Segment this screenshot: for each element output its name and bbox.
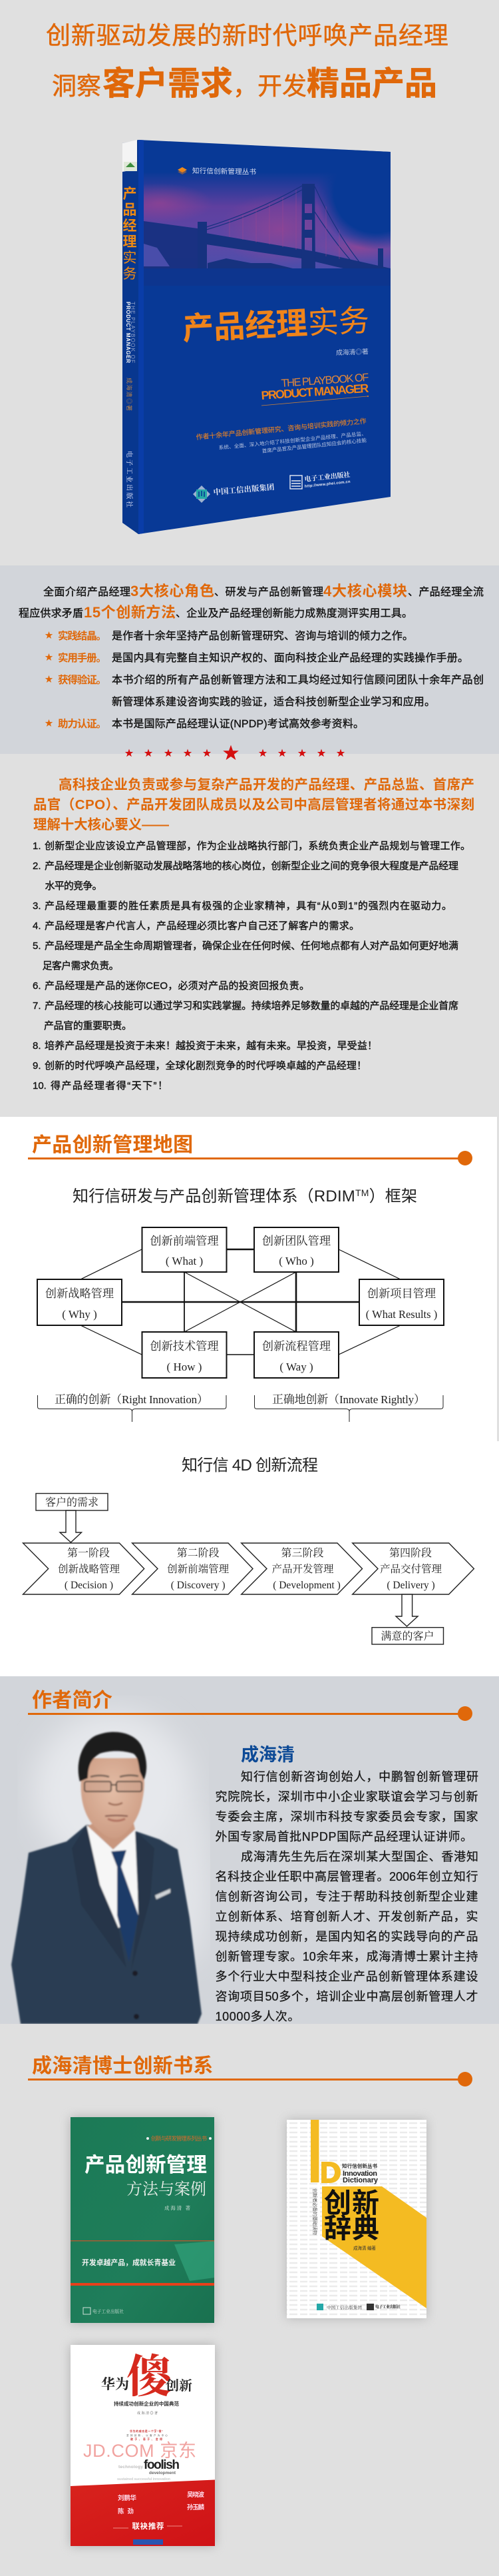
chevron: Decision: 创新战略管理 xyxy=(58,1563,120,1575)
bullet: 助力认证: 助力认证。 xyxy=(58,718,106,730)
book: 创新辞典: 辞典 xyxy=(324,2213,379,2244)
chevron: Discovery: ( Discovery ) xyxy=(171,1580,225,1591)
cover tagline xyxy=(196,416,367,454)
box: What: ( What ) xyxy=(166,1255,203,1267)
publisher logos: http://www.phei.com.cn xyxy=(305,480,351,489)
numbered list of ten points: 创新的时代呼唤产品经理，全球化剧烈竞争的时代呼唤卓越的产品经理！ xyxy=(45,1060,367,1072)
spine: 实 xyxy=(122,250,137,266)
bullet: 获得验证: 获得验证。 xyxy=(58,673,106,686)
book: 华为傻创新: 孙玉麟 xyxy=(187,2503,204,2511)
box: What Results xyxy=(359,1279,444,1325)
panel: author profile xyxy=(0,1676,499,2024)
numbered list of ten points: 足客户需求负责。 xyxy=(43,960,119,972)
numbered list of ten points: 7. xyxy=(33,1000,41,1012)
book: 创新辞典: 知行信创新丛书 xyxy=(342,2163,378,2169)
section heading xyxy=(28,1690,472,1721)
chevron: Delivery: ( Delivery ) xyxy=(387,1580,435,1591)
cover tagline: 首席产品官及产品管理团队应知应会的核心技能 xyxy=(261,436,367,454)
author biography: 现持续成功创新，是国内知名的实践导向的产品 xyxy=(216,1930,478,1943)
box: Why: ( Why ) xyxy=(62,1308,97,1321)
intro paragraph line 2 xyxy=(19,604,413,621)
box: What Results: ( What Results ) xyxy=(366,1308,437,1321)
numbered list of ten points: 10. xyxy=(33,1080,47,1092)
4D heading: 知行信 4D 创新流程 xyxy=(182,1456,318,1474)
bullet: 实践结晶: 实践结晶。 xyxy=(58,629,106,642)
numbered list of ten points: 产品经理是客户代言人，产品经理必须比客户自己还了解客户的需求。 xyxy=(45,920,359,932)
book: 产品创新管理 方法与案例: 方法与案例 xyxy=(126,2180,206,2198)
panel: hero with title and book xyxy=(47,23,448,534)
intro paragraph line 1 xyxy=(43,583,484,599)
book: 华为傻创新: 敢于、善于、舍得 xyxy=(130,2437,162,2441)
numbered list of ten points: 产品经理是企业创新驱动发展战略落地的核心岗位，创新型企业之间的竞争很大程度是产品经理 xyxy=(45,860,458,872)
chevron: Decision xyxy=(23,1543,144,1594)
bullet: 助力认证: 本书是国际产品经理认证(NPDP)考试高效参考资料。 xyxy=(112,718,364,730)
chevron: Development xyxy=(242,1543,362,1594)
box: satisfied customer: 满意的客户 xyxy=(381,1630,434,1642)
spine: 成海清◎著 xyxy=(126,378,133,411)
numbered list of ten points: 得产品经理者得“天下”！ xyxy=(51,1080,168,1092)
book: 华为傻创新 xyxy=(71,2345,215,2546)
author name: 成海清 xyxy=(241,1745,295,1765)
book: 创新辞典: 电子工业出版社 xyxy=(375,2304,401,2310)
author biography: 创新管理专家。10余年来，成海清博士累计主持 xyxy=(216,1950,478,1963)
box: customer needs xyxy=(36,1493,108,1510)
bullet: 获得验证: 新管理体系建设咨询实践的验证，适合科技创新型企业学习和应用。 xyxy=(112,695,435,708)
author biography: 立创新体系、培育创新人才、开发创新产品，实 xyxy=(216,1910,478,1923)
box: Why xyxy=(37,1279,122,1325)
chevron: Delivery: 产品交付管理 xyxy=(380,1563,442,1575)
RDIM heading: ）框架 xyxy=(369,1187,417,1205)
main book title: 产品经理 xyxy=(182,305,308,346)
numbered list of ten points: 产品官的重要职责。 xyxy=(44,1020,132,1032)
intro paragraph line 1: 、产品经理全流 xyxy=(408,586,484,598)
publisher logos: 电子工业出版社 xyxy=(304,470,351,483)
numbered list of ten points: 4. xyxy=(33,920,41,932)
author biography: 究院院长，深圳市中小企业家联谊会学习与创新 xyxy=(216,1790,478,1803)
brace: innovate rightly: 正确地创新（Innovate Rightly） xyxy=(272,1393,425,1406)
brace: right innovation xyxy=(37,1393,226,1422)
book: 华为傻创新: 华为的成功是一个字“傻” xyxy=(130,2429,163,2433)
book: 华为傻创新: 刘鹏华 xyxy=(118,2494,136,2502)
book: 华为傻创新: development xyxy=(149,2471,176,2475)
book: 创新辞典: Innovation xyxy=(343,2170,377,2178)
spine: 经 xyxy=(122,218,137,234)
spine: 理 xyxy=(122,234,137,250)
bullet: 实用手册: 实用手册。 xyxy=(58,651,106,664)
book: 华为傻创新: 傻 xyxy=(126,2352,175,2402)
numbered list of ten points: 水平的竞争。 xyxy=(45,880,102,892)
box: Way: ( Way ) xyxy=(279,1361,313,1373)
author biography xyxy=(216,1770,478,2023)
arrow: needs into stage one xyxy=(60,1510,81,1542)
title line 1: 创新驱动发展的新时代呼唤产品经理 xyxy=(46,22,449,49)
title line 2: 洞察客户需求，开发精品产品 xyxy=(52,66,437,102)
brace: innovate rightly xyxy=(254,1393,443,1422)
box: What xyxy=(142,1227,226,1272)
box: Way xyxy=(254,1332,339,1378)
intro paragraph line 1: 全面介绍产品经理 xyxy=(43,586,130,598)
cover art xyxy=(138,140,391,534)
book: 创新辞典: 创新者必备的基础读物 xyxy=(312,2188,318,2235)
english title xyxy=(261,372,369,406)
bullet: 实践结晶: 是作者十余年坚持产品创新管理研究、咨询与培训的倾力之作。 xyxy=(112,629,413,642)
chevron: Delivery: 第四阶段 xyxy=(389,1547,432,1559)
intro paragraph line 1: 、研发与产品创新管理 xyxy=(214,586,323,598)
numbered list of ten points: 培养产品经理是投资于未来！越投资于未来，越有未来。早投资，早受益！ xyxy=(45,1040,377,1052)
book author: 成海清◎著 xyxy=(336,347,369,357)
numbered list of ten points: 产品经理是产品全生命周期管理者，确保企业在任何时候、任何地点都有人对产品如何更好地满 xyxy=(45,940,458,952)
numbered list of ten points: 8. xyxy=(33,1040,41,1052)
numbered list of ten points: 产品经理最重要的胜任素质是具有极强的企业家精神，具有“从0到1”的强烈内在驱动力。 xyxy=(45,900,452,912)
book: 华为傻创新: 成海清◎著 xyxy=(137,2411,158,2415)
orange intro statement: 理解十大核心要义—— xyxy=(33,816,169,832)
numbered list of ten points: 创新型企业应该设立产品管理部，作为企业战略执行部门，系统负责企业产品规划与管理工作。 xyxy=(45,840,470,852)
section heading: 成海清博士创新书系 xyxy=(32,2055,214,2077)
box: How xyxy=(142,1332,226,1378)
cover tagline: 作者十余年产品创新管理研究、咨询与培训实践的倾力之作 xyxy=(196,416,367,442)
arrow: delivery to satisfied customer xyxy=(396,1594,418,1626)
spine: THE PLAYBOOK OF xyxy=(130,302,136,363)
book: 华为傻创新: 坚持创新、以客户为中心 xyxy=(126,2433,168,2437)
numbered list of ten points: 1. xyxy=(33,840,41,852)
orange intro statement: 高科技企业负责或参与复杂产品开发的产品经理、产品总监、首席产 xyxy=(59,777,474,793)
box: Who xyxy=(254,1227,339,1272)
numbered list of ten points: 3. xyxy=(33,900,41,912)
box: satisfied customer xyxy=(372,1628,443,1644)
decorative star row xyxy=(125,745,345,760)
chevron: Discovery xyxy=(132,1543,253,1594)
numbered list of ten points: 产品经理的核心技能可以通过学习和实践掌握。持续培养足够数量的卓越的产品经理是企业首席 xyxy=(45,1000,458,1012)
author biography: 咨询项目50多个，培训企业中高层创新管理人才 xyxy=(216,1990,478,2003)
book: 创新辞典 xyxy=(287,2120,426,2318)
box: How: ( How ) xyxy=(167,1361,202,1373)
box: How: 创新技术管理 xyxy=(150,1340,219,1353)
box: What Results: 创新项目管理 xyxy=(367,1287,436,1300)
publisher logos xyxy=(193,470,351,503)
box: What: 创新前端管理 xyxy=(150,1235,219,1247)
book: 华为傻创新: 持续成功创新企业的中国典范 xyxy=(114,2400,180,2407)
intro paragraph line 1: 3大核心角色 xyxy=(130,583,214,599)
numbered list of ten points: 2. xyxy=(33,860,41,872)
brace: right innovation: 正确的创新（Right Innovation） xyxy=(55,1393,208,1406)
book: 创新辞典: 中国工信出版集团 xyxy=(327,2304,362,2310)
book: 华为傻创新: 吴晓波 xyxy=(187,2491,204,2499)
author portrait illustration xyxy=(11,1709,208,2024)
book: 产品创新管理 方法与案例: 创新与研发管理系列丛书 xyxy=(151,2135,207,2142)
section heading: 产品创新管理地图 xyxy=(32,1134,193,1156)
intro paragraph line 2: 程应供求矛盾 xyxy=(19,607,83,619)
spine: 务 xyxy=(122,266,137,282)
author biography: 专委会主席，深圳市科技专家委员会专家，国家 xyxy=(216,1810,478,1823)
author biography: 信创新咨询公司，专注于帮助科技创新型企业建 xyxy=(216,1890,478,1903)
book: 华为傻创新: 创新 xyxy=(166,2378,192,2394)
bridge xyxy=(144,184,391,272)
RDIM framework diagram and 4D process xyxy=(21,1117,499,1645)
intro paragraph line 2: 、企业及产品经理创新能力成熟度测评实用工具。 xyxy=(176,607,413,619)
chevron: Development: 产品开发管理 xyxy=(271,1563,334,1575)
panel: ten core points xyxy=(0,754,499,1117)
author biography: 名科技企业任职中高层管理者。2006年创立知行 xyxy=(216,1870,478,1883)
intro paragraph line 2: 15个创新方法 xyxy=(84,604,176,621)
section heading: 作者简介 xyxy=(32,1690,112,1712)
RDIM connector lines xyxy=(81,1249,401,1355)
author biography: 10000多人次。 xyxy=(216,2010,300,2023)
cover tagline: 系统、全面、深入地介绍了科技创新型企业产品经理、产品总监、 xyxy=(218,430,367,451)
spine: 产 xyxy=(122,186,137,202)
panel: book highlights xyxy=(0,565,499,754)
publisher logos: 中国工信出版集团 xyxy=(213,482,275,497)
book: 华为傻创新: foolish xyxy=(144,2458,180,2472)
chevron: Development: 第三阶段 xyxy=(281,1547,324,1559)
numbered list of ten points xyxy=(33,840,470,1092)
book: 创新辞典: 创新 xyxy=(324,2188,379,2218)
panel: product innovation management map xyxy=(0,1117,499,1676)
panel: book series xyxy=(0,2024,499,2576)
chevron: Discovery: 创新前端管理 xyxy=(167,1563,230,1575)
box: customer needs: 客户的需求 xyxy=(45,1496,98,1508)
spine: 品 xyxy=(122,202,137,218)
main book title xyxy=(184,306,368,342)
box: Who: ( Who ) xyxy=(279,1255,314,1267)
book: 产品创新管理 方法与案例: 电子工业出版社 xyxy=(92,2308,124,2314)
spine: 电子工业出版社 xyxy=(125,451,134,507)
main book title: 实务 xyxy=(307,303,370,340)
orange intro statement: 品官（CPO）、产品开发团队成员以及公司中高层管理者将通过本书深刻 xyxy=(33,797,474,812)
section heading xyxy=(28,2055,472,2087)
numbered list of ten points: 产品经理是产品的迷你CEO，必须对产品的投资回报负责。 xyxy=(45,980,309,992)
series label: 知行信创新管理丛书 xyxy=(192,166,256,176)
book: 产品创新管理 方法与案例 xyxy=(71,2117,214,2323)
box: Why: 创新战略管理 xyxy=(45,1287,114,1300)
english title: PRODUCT MANAGER xyxy=(261,382,369,402)
book: 产品创新管理 方法与案例: 成海清 著 xyxy=(164,2204,190,2211)
book: 创新辞典: 成海清 编著 xyxy=(353,2245,376,2251)
book: 产品创新管理 方法与案例: 产品创新管理 xyxy=(84,2154,207,2176)
bullet: 实用手册: 是国内具有完整自主知识产权的、面向科技企业产品经理的实践操作手册。 xyxy=(112,652,468,664)
intro paragraph line 1: 4大核心模块 xyxy=(323,583,407,599)
book: 创新辞典: Dictionary xyxy=(343,2176,379,2184)
orange intro statement xyxy=(33,777,474,832)
book: 华为傻创新: 华为 xyxy=(101,2376,129,2392)
book: 华为傻创新: JD.COM 京东 xyxy=(83,2441,196,2461)
numbered list of ten points: 5. xyxy=(33,940,41,952)
author biography: 知行信创新咨询创始人，中鹏智创新管理研 xyxy=(241,1770,478,1783)
section heading xyxy=(28,1134,472,1165)
chevron: Delivery xyxy=(353,1543,474,1594)
book: 华为傻创新: 联袂推荐 xyxy=(132,2521,164,2531)
RDIM heading: 知行信研发与产品创新管理体系（RDIM xyxy=(73,1187,355,1205)
numbered list of ten points: 9. xyxy=(33,1060,41,1072)
numbered list of ten points: 6. xyxy=(33,980,41,992)
english title: THE PLAYBOOK OF xyxy=(281,372,369,390)
box: Way: 创新流程管理 xyxy=(262,1340,331,1353)
book: 华为傻创新: sustained successful innovation xyxy=(117,2477,171,2481)
box: Who: 创新团队管理 xyxy=(262,1235,331,1247)
bullet: 获得验证: 本书介绍的所有产品创新管理方法和工具均经过知行信顾问团队十余年产品创 xyxy=(112,673,484,686)
book: 华为傻创新: 陈 劲 xyxy=(118,2507,134,2515)
spine: PRODUCT MANAGER xyxy=(125,302,131,363)
book covers xyxy=(65,2112,431,2551)
author biography: 外国专家局首批NPDP国际产品经理认证讲师。 xyxy=(216,1830,473,1843)
chevron: Discovery: 第二阶段 xyxy=(177,1547,220,1559)
chevron: Decision: 第一阶段 xyxy=(67,1547,110,1559)
book cover: 产品经理实务 xyxy=(122,140,391,534)
chevron: Decision: ( Decision ) xyxy=(65,1580,113,1591)
spine xyxy=(122,140,138,534)
chevron: Development: ( Development ) xyxy=(273,1580,341,1591)
author biography: 多个行业大中型科技企业产品创新管理体系建设 xyxy=(216,1970,478,1983)
RDIM heading: TM xyxy=(355,1187,369,1198)
bullet: 获得验证 xyxy=(45,673,484,708)
book: 华为傻创新: technology xyxy=(118,2465,143,2469)
book: 产品创新管理 方法与案例: 开发卓越产品，成就长青基业 xyxy=(82,2258,176,2267)
author biography: 成海清先生先后在深圳某大型国企、香港知 xyxy=(241,1850,478,1863)
